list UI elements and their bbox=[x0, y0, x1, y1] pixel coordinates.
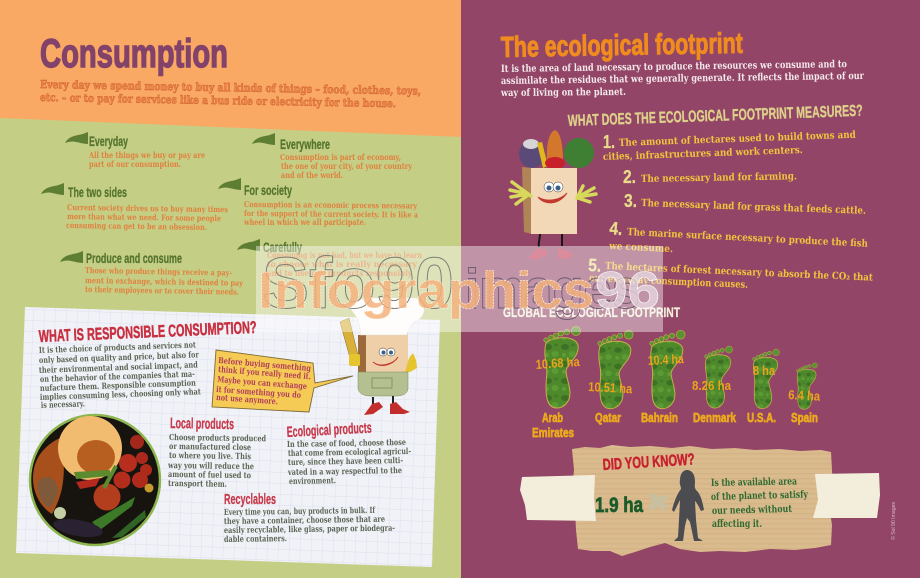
text: definition: It is the choice of products and services not bbox=[39, 340, 196, 355]
item: The two sides: consuming can get to be an obsession. bbox=[66, 220, 207, 232]
text: definition: only based on quality and price, but also for bbox=[39, 349, 199, 365]
panel: did you know cardboard bbox=[520, 445, 880, 556]
title: Consumption: Consumption bbox=[40, 32, 228, 76]
text: available area: Is the available area bbox=[711, 476, 797, 489]
item 2 bbox=[623, 167, 797, 187]
panel: green background bbox=[0, 118, 461, 578]
item 3: 3. bbox=[624, 191, 637, 211]
text: available area: our needs without bbox=[712, 504, 792, 517]
item: For society: for the support of the current society. It is like a bbox=[244, 208, 418, 220]
item 1: The amount of hectares used to build towns and bbox=[619, 130, 856, 149]
foot: U.S.A.: U.S.A. bbox=[747, 410, 776, 425]
intro text: etc. – or to pay for services like a bus ride or electricity for the house. bbox=[40, 91, 396, 110]
intro: ecological footprint definition: way of living on the planet. bbox=[500, 87, 626, 99]
foot: Qatar bbox=[588, 330, 633, 425]
callout: before buying: Before buying something bbox=[218, 355, 311, 373]
block: local products: or manufactured close bbox=[169, 441, 251, 452]
foot: Spain: Spain bbox=[791, 410, 818, 425]
watermark: 96 bbox=[595, 262, 660, 320]
text: definition bbox=[39, 340, 201, 410]
block: local products: way you will reduce the bbox=[167, 460, 254, 471]
icon: left hand bbox=[510, 182, 531, 204]
item: Everywhere: the one of your city, of your country bbox=[281, 161, 412, 171]
photo: vegetables bbox=[30, 415, 160, 545]
chart: footprints by country bbox=[532, 326, 821, 440]
block: ecological products: In the case of food, choose those bbox=[287, 437, 406, 449]
block: recyclables: dable containers. bbox=[224, 533, 287, 544]
block: ecological products: environment. bbox=[289, 475, 336, 486]
foot: Arab Emirates: 10.68 ha bbox=[535, 354, 581, 372]
heading: global ecological footprint: GLOBAL ECOLOGICAL FOOTPRINT bbox=[503, 304, 680, 320]
intro: ecological footprint definition: It is the area of land necessary to produce the resources we consume and to bbox=[501, 59, 847, 75]
item: The two sides: more than what we need. For some people bbox=[67, 211, 221, 223]
item: Everywhere: Everywhere bbox=[280, 136, 330, 152]
block: ecological products bbox=[286, 420, 411, 486]
item 5: 5. bbox=[588, 255, 602, 276]
stat: 1.9 ha: 1.9 ha bbox=[595, 494, 643, 517]
icon: right hand bbox=[577, 186, 596, 202]
callout: before buying: Maybe you can exchange bbox=[217, 374, 307, 391]
item: Carefully: Carefully bbox=[263, 239, 302, 255]
text: definition: nufacture them. Responsible consumption bbox=[40, 378, 196, 393]
item 3 bbox=[624, 191, 866, 217]
item 4: The marine surface necessary to produce the fish bbox=[627, 227, 869, 250]
character: chef paper bag bbox=[340, 298, 424, 415]
foot: Spain: 6.4 ha bbox=[788, 387, 821, 404]
watermark: Sfo90 bbox=[262, 244, 454, 324]
watermark: images bbox=[465, 257, 640, 320]
item: For society: Consumption is an economic process necessary bbox=[244, 199, 417, 211]
block: ecological products: ture, since they have been culti- bbox=[288, 455, 403, 467]
block: ecological products: that come from ecological agricul- bbox=[288, 446, 411, 458]
text: available area bbox=[711, 476, 809, 530]
item: Everywhere: and of the world. bbox=[281, 170, 343, 180]
watermark: Infographics bbox=[258, 262, 594, 320]
item: For society: wheel in which we all participate. bbox=[243, 217, 366, 227]
item: Produce and consume: ment in exchange, which is destined to pay bbox=[85, 275, 243, 288]
block: recyclables: easily recyclable, like glass, paper or biodegra- bbox=[224, 523, 395, 535]
item: The two sides bbox=[41, 183, 228, 232]
foot: U.S.A. bbox=[747, 349, 779, 425]
block: local products bbox=[167, 415, 266, 489]
item 4: 4. bbox=[609, 218, 623, 239]
foot: Arab Emirates: Arab bbox=[542, 410, 563, 425]
block: recyclables bbox=[224, 491, 395, 544]
foot: Bahrain: Bahrain bbox=[641, 410, 678, 425]
foot: Arab Emirates: Emirates bbox=[532, 425, 574, 440]
heading: What is responsible consumption: WHAT IS RESPONSIBLE CONSUMPTION? bbox=[38, 318, 257, 346]
tape: right bbox=[813, 473, 880, 518]
foot: Denmark bbox=[692, 346, 737, 425]
foot: Spain bbox=[788, 363, 821, 425]
item: Carefully bbox=[237, 239, 422, 278]
text: available area: of the planet to satisfy bbox=[711, 489, 809, 503]
item 2: 2. bbox=[623, 167, 636, 187]
foot: Bahrain: 10.4 ha bbox=[647, 351, 685, 368]
item 5: The hectares of forest necessary to absorb the CO₂ that bbox=[605, 261, 873, 284]
foot: Arab Emirates bbox=[532, 326, 581, 440]
foot: Bahrain bbox=[641, 330, 685, 425]
item 4: we consume. bbox=[608, 241, 673, 255]
item: Everywhere bbox=[252, 133, 412, 180]
item: The two sides: Current society drives us to buy many times bbox=[67, 202, 228, 214]
item: Produce and consume: Produce and consume bbox=[86, 250, 182, 266]
text: definition: their environmental and social impact, and bbox=[39, 359, 198, 375]
item: Everyday: All the things we buy or pay are bbox=[88, 150, 205, 160]
block: local products: transport them. bbox=[168, 478, 227, 489]
item: Everyday: Everyday bbox=[89, 133, 128, 149]
block: local products: to where you live. This bbox=[169, 450, 251, 461]
panel: consumption orange background bbox=[0, 0, 461, 140]
item: For society bbox=[218, 178, 418, 227]
foot: Denmark: Denmark bbox=[693, 410, 737, 425]
item 4 bbox=[608, 218, 869, 255]
intro text: Every day we spend money to buy all kinds of things – food, clothes, toys, bbox=[40, 78, 421, 98]
foot: Denmark: 8.26 ha bbox=[692, 378, 732, 393]
item 1: 1. bbox=[603, 132, 615, 152]
block: recyclables: Recyclables bbox=[224, 491, 276, 508]
list: footprint measures bbox=[588, 130, 873, 291]
text: available area: affecting it. bbox=[712, 519, 762, 530]
block: local products: Choose products produced bbox=[169, 432, 266, 443]
panel: ecological footprint maroon background bbox=[461, 0, 920, 578]
panel: responsible consumption graph paper bbox=[16, 307, 440, 567]
callout: before buying: it for something you do bbox=[216, 384, 302, 400]
callout: before buying: not use anymore. bbox=[216, 392, 278, 406]
icon: times mark bbox=[648, 493, 668, 511]
character: grocery bag bbox=[510, 130, 596, 260]
item: For society: For society bbox=[244, 182, 292, 198]
heading: did you know: DID YOU KNOW? bbox=[602, 451, 695, 474]
intro: ecological footprint definition bbox=[500, 59, 865, 99]
foot: U.S.A.: 8 ha bbox=[753, 363, 776, 378]
item: Carefully: and to use our products responsibly bbox=[267, 268, 412, 278]
block: recyclables: Every time you can, buy products in bulk. If bbox=[224, 505, 376, 517]
item 1: cities, infrastructures and work centers. bbox=[603, 145, 803, 163]
item: The two sides: The two sides bbox=[68, 184, 127, 200]
item: Produce and consume: Those who produce things receive a pay- bbox=[85, 265, 232, 278]
foot: Qatar: 10.51 ha bbox=[588, 379, 633, 396]
item 1 bbox=[603, 130, 856, 163]
item 3: The necessary land for grass that feeds cattle. bbox=[641, 198, 866, 217]
item 2: The necessary land for farming. bbox=[641, 171, 797, 185]
icon: person silhouette bbox=[672, 470, 704, 541]
block: ecological products: vated in a way respectful to the bbox=[287, 465, 402, 477]
block: local products: amount of fuel used to bbox=[168, 469, 251, 480]
item: Everyday bbox=[65, 132, 205, 169]
text: definition: implies consuming less, choosing only what bbox=[40, 386, 201, 402]
item: Produce and consume bbox=[60, 250, 243, 297]
callout: before buying bbox=[212, 350, 353, 412]
text: definition: is necessary. bbox=[41, 398, 85, 410]
item: Carefully: Consuming is not bad, but we have to learn bbox=[267, 250, 422, 260]
block: ecological products: Ecological products bbox=[286, 420, 372, 441]
item: Carefully: to choose what is really necessary bbox=[267, 259, 417, 269]
foot: Qatar: Qatar bbox=[595, 410, 621, 425]
item: Produce and consume: to their employees or to cover their needs. bbox=[85, 284, 239, 297]
item 5: our everyday consumption causes. bbox=[589, 273, 748, 291]
item: Everyday: part of our consumption. bbox=[89, 159, 181, 169]
copyright note: © Sol 90 Images bbox=[890, 502, 897, 540]
text: definition: on the behavior of the companies that ma- bbox=[40, 369, 195, 384]
block: recyclables: they have a container, choose those that are bbox=[224, 514, 385, 526]
intro text bbox=[40, 78, 421, 110]
item 5 bbox=[588, 255, 873, 291]
title: The ecological footprint: The ecological footprint bbox=[501, 28, 743, 64]
block: local products: Local products bbox=[170, 415, 234, 433]
tape: left bbox=[520, 475, 596, 521]
item: Everywhere: Consumption is part of economy, bbox=[280, 152, 401, 162]
callout: before buying: think if you really need it. bbox=[218, 364, 311, 381]
watermark bbox=[256, 244, 663, 332]
